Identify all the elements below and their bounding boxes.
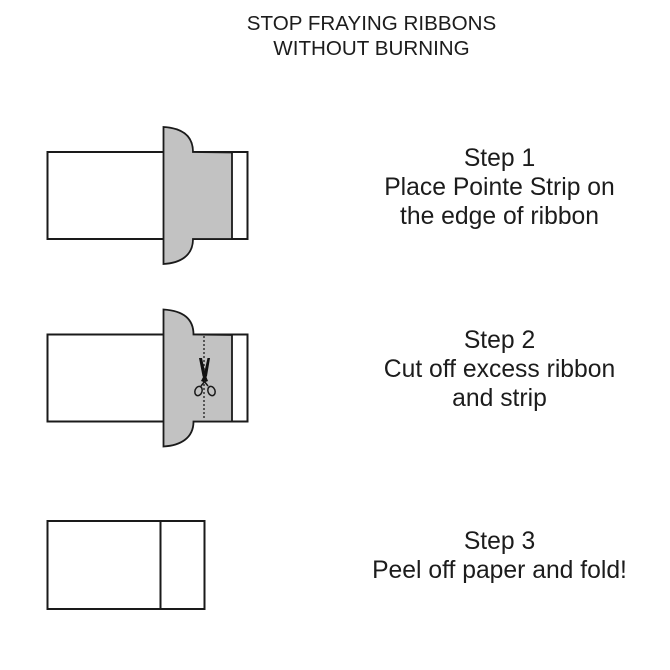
title: WITHOUT BURNING bbox=[273, 37, 470, 60]
text: step 1: the edge of ribbon bbox=[400, 203, 599, 230]
folded ribbon rectangle bbox=[48, 521, 204, 609]
title bbox=[247, 12, 496, 60]
icon: scissors bbox=[194, 358, 216, 397]
fold line bbox=[160, 521, 162, 609]
text: step 2 bbox=[384, 327, 615, 412]
text: step 3 bbox=[372, 528, 627, 584]
title: STOP FRAYING RIBBONS bbox=[247, 12, 496, 35]
text: step 2: and strip bbox=[452, 385, 547, 412]
diagram: step 3 folded ribbon bbox=[48, 521, 204, 609]
pointe strip bbox=[164, 310, 232, 446]
text: step 2: Cut off excess ribbon bbox=[384, 356, 615, 383]
text: step 1: Step 1 bbox=[464, 145, 535, 172]
diagram: step 1 ribbon with strip bbox=[48, 127, 248, 264]
text: step 2: Step 2 bbox=[464, 327, 535, 354]
diagram: step 2 cutting bbox=[48, 310, 248, 446]
pointe strip bbox=[164, 127, 232, 264]
text: step 3: Peel off paper and fold! bbox=[372, 556, 627, 584]
text: step 1: Place Pointe Strip on bbox=[384, 174, 615, 201]
ribbon rectangle bbox=[48, 334, 248, 422]
ribbon rectangle bbox=[48, 152, 248, 239]
text: step 1 bbox=[384, 145, 615, 230]
text: step 3: Step 3 bbox=[464, 528, 535, 554]
dotted cut line bbox=[203, 336, 205, 420]
